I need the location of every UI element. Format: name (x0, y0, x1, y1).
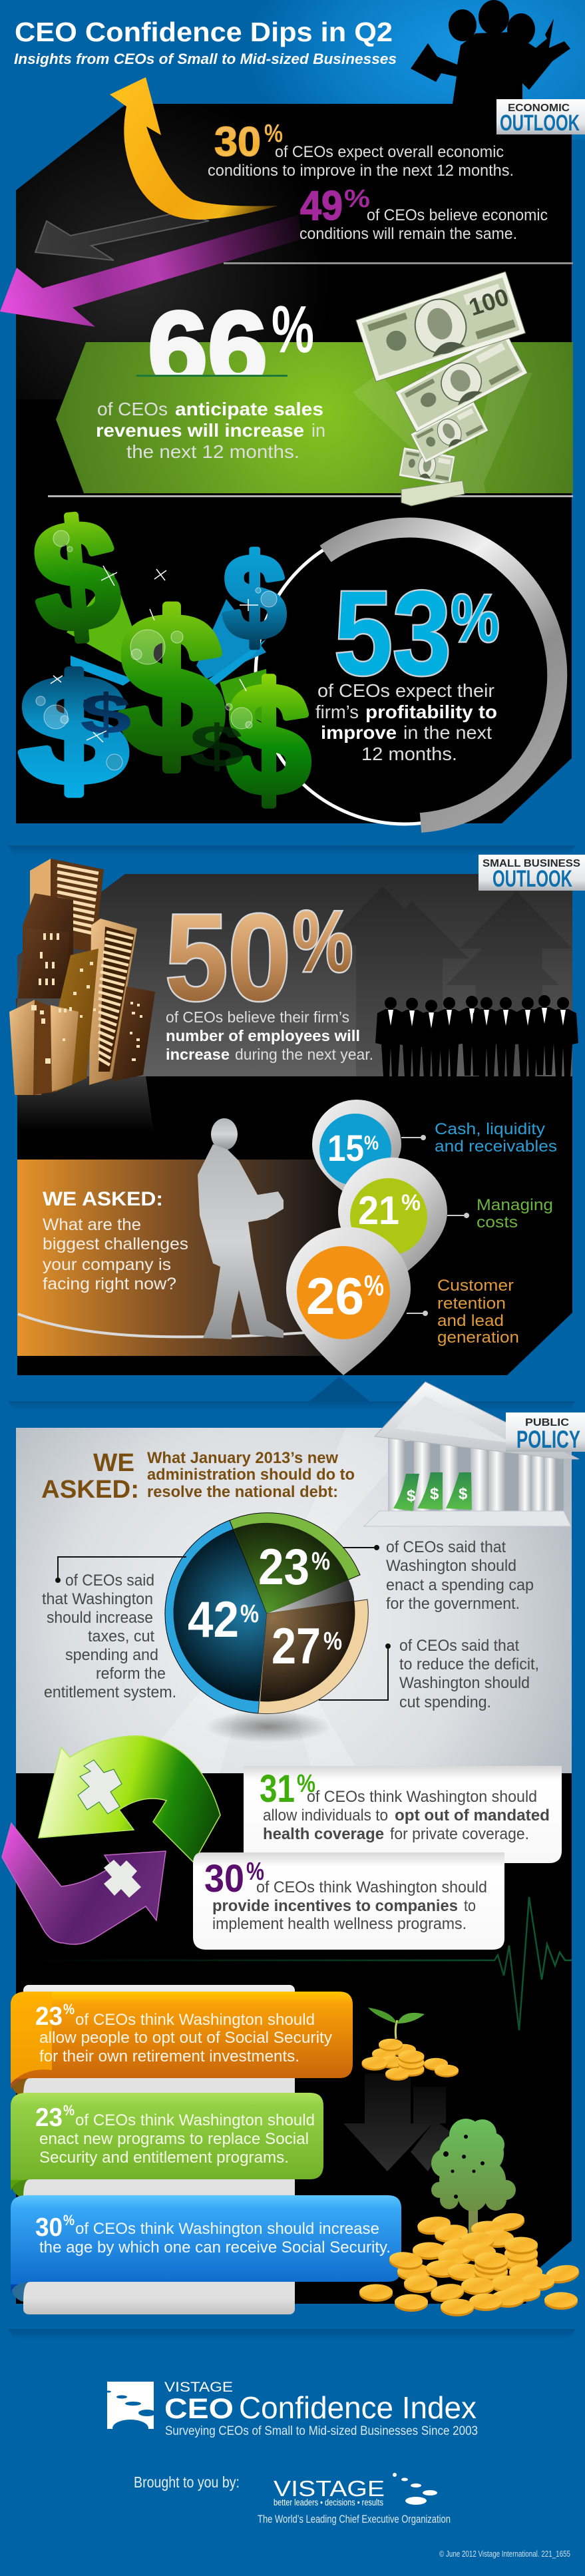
icon: exploding dollar signs: $ (227, 652, 310, 827)
arrow: grey arrow down (35, 212, 209, 260)
pie shadow (205, 1711, 331, 1743)
ribbon: green 23 percent: enact new programs to replace Social (39, 2130, 309, 2148)
label: customer retention: Customer (437, 1277, 514, 1295)
logo: Vistage: better leaders • decisions • results (274, 2497, 383, 2507)
stat: 53 percent: 53 (334, 566, 451, 700)
ribbon backing card (23, 1985, 295, 2314)
tag: small business outlook (479, 855, 585, 892)
arrow: green health arrow (39, 1736, 220, 1862)
sparkles (51, 566, 258, 742)
pin: 21 percent: 21 (358, 1188, 399, 1233)
profitability text: 12 months. (361, 744, 457, 764)
heading: we asked national debt: administration should do to (147, 1466, 355, 1484)
stat: 49 percent (299, 183, 548, 243)
heading: we asked national debt: resolve the national debt: (147, 1483, 338, 1501)
label: cash liquidity: Cash, liquidity (435, 1120, 545, 1138)
ribbon: orange 23 percent (11, 1992, 353, 2097)
stat: 49 percent: % (344, 185, 370, 213)
card: 31 percent: health coverage (263, 1825, 384, 1843)
profitability text (315, 680, 497, 764)
icon: capitol building with money bags: $ (430, 1485, 439, 1503)
text: cut spending: to reduce the deficit, (399, 1655, 539, 1673)
stat: 49 percent: conditions will remain the same. (299, 225, 517, 243)
arrow: dark downward arrows (343, 2073, 453, 2171)
text: taxes and spending: should increase (47, 1609, 153, 1627)
ribbon: green 23 percent (11, 2093, 323, 2198)
profitability text: of CEOs expect their (317, 680, 494, 701)
icon: tree (431, 2119, 516, 2235)
pie slice: 27 percent (258, 1600, 368, 1714)
panel: we asked challenges (17, 1160, 373, 1356)
logo: CEO Confidence Index: Confidence Index (239, 2390, 477, 2425)
header glow (0, 0, 585, 140)
we asked text (43, 1188, 188, 1293)
windows (31, 933, 142, 1064)
pie slice: 42 percent (165, 1520, 267, 1713)
tag: public policy: PUBLIC (525, 1417, 569, 1428)
text: taxes and spending: of CEOs said (65, 1572, 154, 1590)
employees text: during the next year. (235, 1046, 373, 1063)
pie chart (165, 1513, 368, 1714)
panel: sales revenue green (56, 342, 573, 493)
tightrope (18, 1314, 306, 1337)
text: spending cap: of CEOs said that (386, 1538, 506, 1556)
icon: exploding dollar signs: $ (27, 488, 125, 665)
icon: crowd of business people (375, 995, 578, 1080)
text: taxes and spending: taxes, cut (88, 1627, 154, 1645)
ring around 53 percent (256, 526, 557, 824)
stat: 30 percent: conditions to improve in the next 12 months. (208, 162, 514, 180)
ribbon: orange 23 percent: allow people to opt out of Social Security (39, 2029, 333, 2047)
icon: exploding dollar signs: $ (189, 713, 244, 780)
heading: we asked national debt: What January 2013’s new (147, 1449, 338, 1467)
ribbon: blue 30 percent: the age by which one can receive Social Security. (39, 2239, 391, 2256)
we asked text: your company is (43, 1255, 171, 1274)
logo: CEO Confidence Index: VISTAGE (164, 2380, 233, 2395)
card: 31 percent (244, 1766, 562, 1863)
text: taxes and spending: spending and (65, 1646, 158, 1664)
tag: economic outlook: ECONOMIC (508, 103, 570, 114)
stat: 53 percent: % (451, 581, 499, 656)
profitability text: profitability to (365, 702, 497, 722)
we asked text: What are the (43, 1215, 141, 1234)
ribbon: green 23 percent: % (63, 2102, 75, 2119)
stat: 30 percent: % (264, 120, 283, 148)
icon: exploding dollar signs (20, 488, 310, 827)
sales revenue text: of CEOs (97, 399, 168, 419)
leader lines (56, 1546, 390, 1700)
pin: 26 percent: % (364, 1269, 384, 1302)
card: 30 percent: 30 (204, 1857, 244, 1900)
ribbon: orange 23 percent: of CEOs think Washington should (75, 2011, 315, 2029)
employees text: number of employees will (166, 1027, 360, 1044)
stat: 30 percent (208, 119, 514, 180)
sales revenue text: the next 12 months. (126, 441, 299, 462)
icon: man walking on tightrope (198, 1118, 284, 1339)
we asked text: WE ASKED: (43, 1188, 163, 1210)
text: spending cap: Washington should (386, 1557, 516, 1575)
card: 30 percent: to (464, 1897, 476, 1915)
icon: falling money (356, 272, 528, 506)
stat: 66 percent: 66 (148, 290, 268, 407)
text: spending cap: enact a spending cap (386, 1576, 534, 1594)
employees text: increase (166, 1046, 230, 1063)
text: cut spending (399, 1637, 539, 1711)
employees text (166, 1008, 373, 1063)
card: 31 percent: 31 (260, 1767, 295, 1811)
label: cash liquidity: and receivables (435, 1138, 557, 1156)
sales revenue text: revenues will increase (96, 420, 304, 441)
text: spending cap (386, 1538, 534, 1613)
ribbon: green 23 percent: 23 (35, 2103, 63, 2132)
text: taxes and spending (42, 1572, 176, 1701)
card: 30 percent: provide incentives to companies (212, 1897, 458, 1915)
card: 30 percent (193, 1852, 504, 1950)
card: 30 percent: of CEOs think Washington should (256, 1878, 487, 1896)
ribbon: orange 23 percent: 23 (35, 2002, 63, 2031)
text: cut spending: Washington should (399, 1674, 530, 1692)
pin: 26 percent (286, 1227, 411, 1375)
sales revenue text: in (311, 420, 325, 441)
arrow: yellow arrow up (110, 77, 278, 220)
stat: 49 percent: of CEOs believe economic (367, 206, 548, 224)
icon: capitol building with money bags (364, 1382, 579, 1526)
label: managing costs: Managing (477, 1196, 553, 1214)
panel: public policy grey background (16, 1428, 572, 1777)
ribbon: green 23 percent: Security and entitlement programs. (39, 2149, 289, 2167)
panel: health and social security black (16, 1773, 572, 2304)
panel glow (16, 104, 399, 399)
panel: small business grey top (17, 874, 572, 1132)
ribbon: orange 23 percent: for their own retirement investments. (39, 2047, 299, 2065)
text: cut spending: of CEOs said that (399, 1637, 519, 1655)
pin: 15 percent (312, 1100, 401, 1198)
label: customer retention: retention (437, 1295, 506, 1313)
background up arrows (326, 886, 572, 1076)
logo: Vistage (258, 2473, 451, 2525)
ribbon: blue 30 percent (11, 2195, 401, 2302)
tag: public policy (506, 1412, 585, 1453)
heading: we asked national debt: WE (93, 1449, 134, 1477)
pie slice: 23 percent (230, 1513, 360, 1613)
card: 31 percent: of CEOs think Washington should (307, 1788, 537, 1806)
card: 30 percent: % (246, 1858, 264, 1886)
icon: city buildings (9, 859, 155, 1095)
sales revenue text (96, 399, 325, 462)
icon: falling money: 100 (465, 283, 512, 321)
bubbles (36, 531, 277, 770)
ribbon: orange 23 percent: % (63, 2001, 75, 2018)
stat: 50 percent: 50 (165, 889, 291, 1026)
pie chart: % (240, 1600, 259, 1628)
pie chart: 27 (272, 1618, 321, 1675)
we asked text: biggest challenges (43, 1235, 188, 1253)
pie chart: 23 (258, 1539, 309, 1596)
text: taxes and spending: that Washington (42, 1590, 153, 1608)
light rays behind money (353, 359, 532, 493)
ribbon: blue 30 percent: 30 (35, 2213, 63, 2242)
logo: CEO Confidence Index (106, 2380, 478, 2438)
text: cut spending: cut spending. (399, 1693, 491, 1711)
label: managing costs: costs (477, 1213, 518, 1231)
icon: seedling on coins (362, 2008, 459, 2081)
stat: 30 percent: of CEOs expect overall economic (275, 143, 504, 161)
label: managing costs (447, 1196, 553, 1231)
icon: exploding dollar signs: $ (118, 574, 224, 797)
icon: exploding dollar signs: $ (80, 682, 132, 746)
tag: economic outlook (496, 99, 585, 136)
logo: Vistage: VISTAGE (274, 2476, 385, 2501)
employees text: of CEOs believe their firm’s (166, 1008, 349, 1026)
icon: exploding dollar signs: $ (223, 531, 286, 664)
profitability text: firm’s (315, 702, 359, 722)
logo: CEO Confidence Index: CEO (164, 2393, 234, 2425)
pie chart: % (323, 1627, 342, 1655)
stat: 49 percent: 49 (300, 183, 343, 229)
label: customer retention: and lead (437, 1312, 504, 1330)
label: customer retention: generation (437, 1329, 519, 1347)
card: 30 percent: implement health wellness programs. (212, 1915, 467, 1933)
ribbon: blue 30 percent: of CEOs think Washington should increase (75, 2220, 379, 2238)
title: CEO Confidence Dips in Q2 (15, 17, 393, 47)
heartbeat line (27, 1897, 572, 2030)
arrow: purple health arrow (2, 1823, 166, 1944)
pin: 21 percent (338, 1158, 447, 1285)
icon: capitol building with money bags: $ (407, 1487, 416, 1505)
text: taxes and spending: entitlement system. (44, 1683, 176, 1701)
icon: exploding dollar signs: $ (20, 646, 127, 815)
pie chart: % (311, 1548, 330, 1576)
text: taxes and spending: reform the (96, 1665, 166, 1683)
ribbon: green 23 percent: of CEOs think Washington should (75, 2111, 315, 2129)
pin: 26 percent: 26 (306, 1267, 364, 1325)
card: 31 percent: for private coverage. (390, 1825, 529, 1843)
logo mark (106, 2382, 156, 2437)
profitability text: in the next (403, 722, 492, 743)
icon: capitol building with money bags: $ (459, 1485, 468, 1503)
ribbon: blue 30 percent: % (63, 2212, 75, 2229)
stat: 66 percent: % (272, 292, 314, 367)
pin: 15 percent: 15 (327, 1127, 364, 1169)
card: 31 percent: % (297, 1770, 315, 1798)
pie slice: small grey (267, 1580, 354, 1613)
stat: 66 percent (136, 306, 313, 377)
stat: 50 percent: % (293, 893, 353, 990)
icon: three CEO silhouettes reading (411, 0, 570, 104)
money stack (401, 481, 465, 506)
pin: 21 percent: % (401, 1190, 421, 1215)
profitability text: improve (321, 722, 397, 743)
pie chart: 42 (188, 1592, 239, 1648)
panel: economic outlook black background (16, 104, 572, 823)
heading: we asked national debt (41, 1449, 355, 1504)
sales revenue text: anticipate sales (175, 399, 323, 419)
heading: we asked national debt: ASKED: (41, 1476, 139, 1504)
logo: Vistage: The World’s Leading Chief Executive Organization (258, 2513, 451, 2525)
arrow: purple arrow down (0, 215, 302, 327)
label: cash liquidity (401, 1120, 557, 1156)
tag: small business outlook: SMALL BUSINESS (483, 858, 580, 869)
brought to you by: Brought to you by: (134, 2473, 240, 2491)
subtitle: Insights from CEOs of Small to Mid-sized Businesses (14, 51, 397, 67)
logo: CEO Confidence Index: Surveying CEOs of Small to Mid-sized Businesses Since 2003 (165, 2424, 478, 2438)
text: spending cap: for the government. (386, 1595, 520, 1613)
card: 31 percent: opt out of mandated (395, 1807, 550, 1825)
panel: small business black background (17, 874, 572, 1375)
pin: 15 percent: % (364, 1132, 379, 1154)
card: 31 percent: allow individuals to (263, 1807, 388, 1825)
label: customer retention (407, 1277, 519, 1347)
we asked text: facing right now? (43, 1275, 176, 1293)
stat: 30 percent: 30 (214, 119, 261, 165)
icon: pile of gold coins (359, 2211, 580, 2316)
